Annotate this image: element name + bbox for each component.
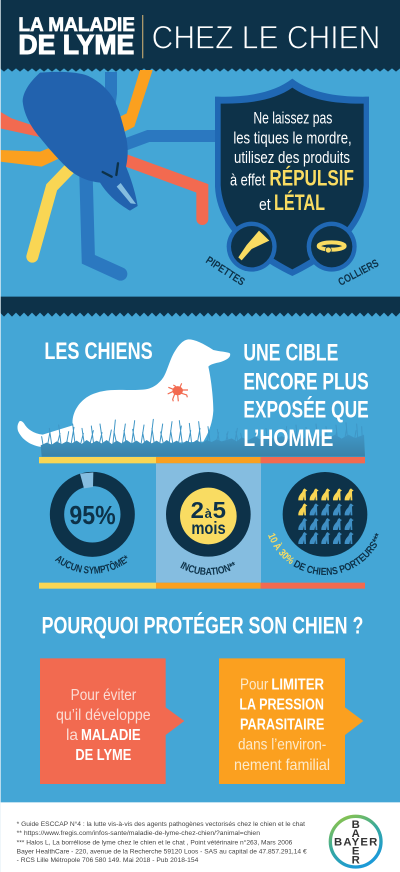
column bars: top xyxy=(39,457,365,463)
stat: 2 to 5 months incubation: à xyxy=(205,506,213,521)
label: colliers: COLLIERS xyxy=(336,257,381,289)
callout: coral box: la xyxy=(66,727,78,744)
shield text: à effet xyxy=(230,171,266,190)
panel: shield with product advice xyxy=(203,79,381,289)
stat: 95% no symptoms xyxy=(50,472,135,574)
footnotes: - RCS Lille Métropole 706 580 149. Mai 2018 - Pub 2018-154 xyxy=(17,857,199,864)
stat: 2 to 5 months incubation: INCUBATION** xyxy=(180,562,235,575)
logo: bayer: R xyxy=(352,855,360,867)
title: la maladie de lyme: LA MALADIE xyxy=(18,15,135,36)
stat: 95% no symptoms: 95% xyxy=(69,500,116,530)
icon grid: dogs xyxy=(298,488,354,544)
logo: bayer: B xyxy=(352,819,360,831)
stat: 2 to 5 months incubation: 5 xyxy=(213,497,226,523)
heading: une cible xyxy=(243,340,369,452)
logo: bayer: BAYER xyxy=(334,837,377,849)
shield text: LÉTAL xyxy=(274,190,325,215)
callout: orange box: LA PRESSION xyxy=(239,696,324,713)
title: la maladie de lyme: DE LYME xyxy=(18,29,134,60)
illustration: tick xyxy=(0,70,220,274)
stat: 2 to 5 months incubation: 2 xyxy=(191,497,204,523)
callout: coral box xyxy=(40,658,184,784)
shield text: et xyxy=(259,195,271,214)
middle column highlight xyxy=(156,463,261,583)
dark divider band xyxy=(0,297,400,317)
footnotes: * Guide ESCCAP N°4 : la lutte vis-à-vis des agents pathogènes vectorisés chez le chien et le chat xyxy=(17,820,305,828)
callout: orange box: Pour xyxy=(240,676,269,693)
icon: tick on dog xyxy=(168,383,188,401)
heading: les chiens: LES CHIENS xyxy=(44,338,153,365)
footer panel xyxy=(0,802,400,872)
logo: bayer: E xyxy=(352,846,360,858)
logo: bayer: A xyxy=(352,828,360,840)
callout: orange box: nement familial xyxy=(234,757,330,774)
callout: coral box: MALADIE xyxy=(81,727,141,744)
stat: 95% no symptoms: AUCUN SYMPTÔME* xyxy=(54,555,128,574)
label: pipettes: PIPETTES xyxy=(203,254,247,288)
panel: dogs section xyxy=(18,338,378,589)
footnotes: *** Halos L, La borréliose de lyme chez le chien et le chat , Point vétérinaire n°263, Mars 2006 xyxy=(17,838,293,846)
heading: une cible: L’HOMME xyxy=(243,425,333,452)
footnotes xyxy=(17,820,307,864)
stat: 2 to 5 months incubation xyxy=(166,472,251,575)
page edge xyxy=(0,0,1,872)
stat: 10 to 30% carrier dogs xyxy=(268,472,378,575)
shield text: les tiques le mordre, xyxy=(233,128,352,147)
title: la maladie de lyme xyxy=(18,15,135,60)
logo: bayer xyxy=(330,816,381,867)
callout: coral box: qu’il développe xyxy=(56,707,151,724)
stat: 2 to 5 months incubation: mois xyxy=(191,518,226,538)
callout: orange box: LIMITER xyxy=(271,676,324,693)
shield text: utilisez des produits xyxy=(234,148,350,167)
footnotes: ** https://www.fregis.com/infos-sante/maladie-de-lyme-chez-chien/?animal=chien xyxy=(17,830,261,837)
title: chez le chien: CHEZ LE CHIEN xyxy=(152,18,380,55)
footnotes: Bayer HealthCare - 220, avenue de la Recherche 59120 Loos - SAS au capital de 47.857.291,14 € xyxy=(17,848,307,855)
header band xyxy=(0,0,400,72)
heading: une cible: UNE CIBLE xyxy=(243,340,338,367)
callout: orange box xyxy=(219,658,363,784)
callout: orange box: PARASITAIRE xyxy=(240,717,325,734)
shield text: Ne laissez pas xyxy=(253,108,332,127)
callout: coral box: Pour éviter xyxy=(71,687,137,704)
column bars: bottom xyxy=(39,583,365,589)
callout: orange box: dans l’environ- xyxy=(238,737,326,754)
shield text: RÉPULSIF xyxy=(269,166,354,191)
callout: coral box: DE LYME xyxy=(75,747,132,764)
illustration: dog silhouette xyxy=(17,339,230,447)
stat: 10 to 30% carrier dogs: 10 À 30% DE CHIENS PORTEURS*** xyxy=(268,533,378,575)
icon: pipette xyxy=(227,222,277,272)
panel: why protect xyxy=(0,611,400,872)
icon: collar xyxy=(307,222,357,272)
illustration: grass xyxy=(41,419,365,457)
shield text xyxy=(230,108,354,215)
